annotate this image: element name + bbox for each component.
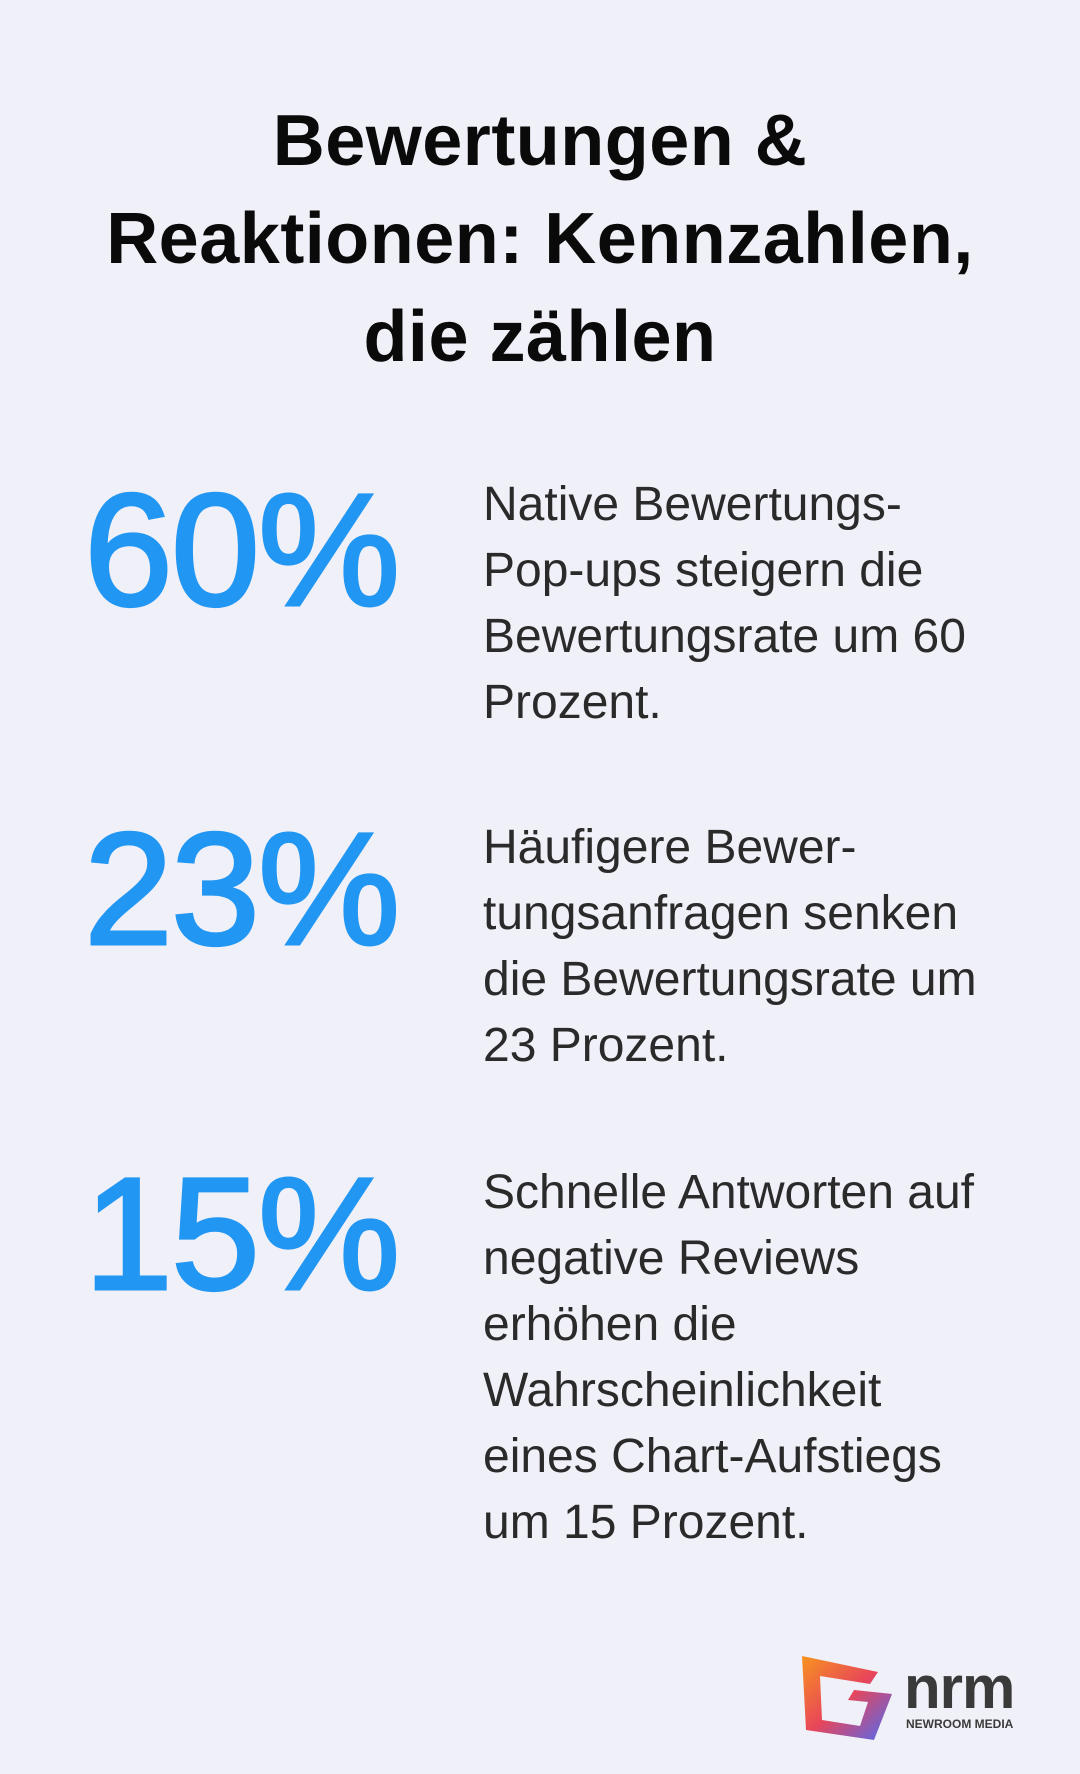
stat: 15%: 15% xyxy=(84,1144,398,1323)
text: 60% description: Bewertungsrate um 60 xyxy=(483,610,966,663)
icon: logo mark xyxy=(802,1656,892,1740)
text: 60% description: Native Bewertungs- xyxy=(483,478,902,531)
text: 15% description: eines Chart-Aufstiegs xyxy=(483,1430,942,1483)
title xyxy=(106,101,974,377)
text: 15% description: um 15 Prozent. xyxy=(483,1496,808,1549)
text: 23% description: die Bewertungsrate um xyxy=(483,953,977,1006)
text: 15% description: negative Reviews xyxy=(483,1232,859,1285)
stat: 23%: 23% xyxy=(84,799,398,978)
title: Bewertungen & xyxy=(273,101,807,181)
stat: 60%: 60% xyxy=(84,460,398,639)
text: 60% description: Prozent. xyxy=(483,676,662,729)
text: 15% description: Wahrscheinlichkeit xyxy=(483,1364,881,1417)
text: 23% description: Häufigere Bewer- xyxy=(483,821,856,874)
text: 15% description: erhöhen die xyxy=(483,1298,737,1351)
text: 23% description xyxy=(483,821,977,1072)
title: die zählen xyxy=(363,297,717,377)
title: Reaktionen: Kennzahlen, xyxy=(106,199,974,279)
logo: newroom media xyxy=(802,1654,1014,1740)
logo text: NEWROOM MEDIA xyxy=(906,1717,1014,1731)
text: 23% description: tungsanfragen senken xyxy=(483,887,958,940)
text: 60% description: Pop-ups steigern die xyxy=(483,544,923,597)
text: 15% description xyxy=(483,1166,974,1549)
logo text: nrm xyxy=(904,1654,1014,1721)
text: 15% description: Schnelle Antworten auf xyxy=(483,1166,974,1219)
text: 23% description: 23 Prozent. xyxy=(483,1019,728,1072)
text: 60% description xyxy=(483,478,966,729)
